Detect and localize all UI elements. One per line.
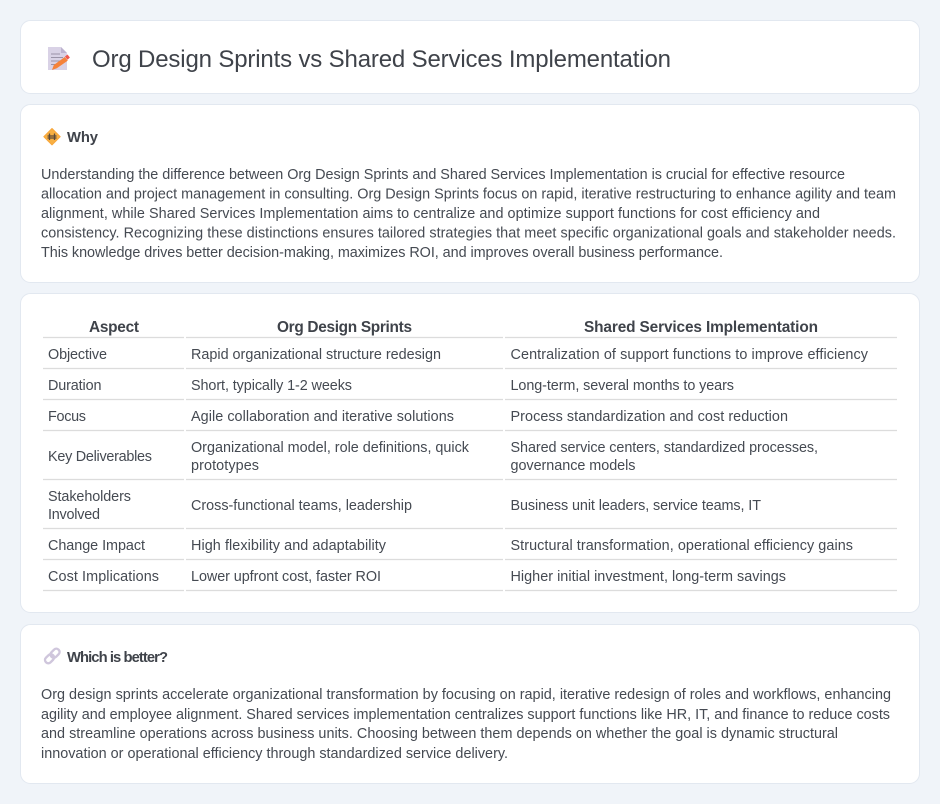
text block: why: consistency. Recognizing these distinctions ensures tailored strategies that meet specific organizational goals and stakeholder needs. — [41, 226, 896, 242]
row: objective: Centralization of support functions to improve efficiency — [510, 347, 869, 363]
text block: which is better: Org design sprints accelerate organizational transformation by focusing on rapid, iterative redesign of roles and workflows, enhancing — [41, 687, 891, 703]
row: key deliverables: Shared service centers, standardized processes, — [510, 440, 818, 456]
row: focus — [48, 409, 788, 425]
row: key deliverables: governance models — [510, 458, 636, 474]
text block: which is better: and streamline operations across business units. Choosing between them depends on whether the goal is dynamic structural — [41, 726, 838, 742]
row: stakeholders involved: Stakeholders — [48, 489, 131, 505]
title: Org Design Sprints vs Shared Services Implementation — [92, 46, 671, 73]
row: focus: Process standardization and cost reduction — [510, 409, 788, 425]
row: cost implications: Lower upfront cost, faster ROI — [191, 569, 381, 585]
row: key deliverables: Organizational model, role definitions, quick — [191, 440, 470, 456]
text block: why: allocation and project management in consulting. Org Design Sprints focus on rapid, iterative restructuring to enhance agility and team — [41, 186, 896, 202]
row: change impact — [48, 538, 853, 554]
panel: why — [20, 104, 920, 282]
text block: which is better — [41, 687, 891, 762]
row: objective — [48, 347, 869, 363]
text block: which is better: innovation or operational efficiency through standardized service delivery. — [41, 746, 508, 762]
row: cost implications: Cost Implications — [48, 569, 159, 585]
text block: which is better: agility and employee alignment. Shared services implementation centralizes support functions like HR, IT, and finance to reduce costs — [41, 707, 890, 723]
row: focus: Agile collaboration and iterative solutions — [191, 409, 454, 425]
heading: which is better: Which is better? — [67, 650, 168, 666]
table header — [89, 319, 818, 336]
row: duration: Long-term, several months to years — [510, 378, 734, 394]
row: stakeholders involved — [48, 489, 761, 523]
table header: Org Design Sprints — [277, 319, 412, 336]
panel: comparison table — [20, 294, 920, 612]
row: duration: Duration — [48, 378, 102, 394]
row: stakeholders involved: Cross-functional teams, leadership — [191, 498, 412, 514]
table header: Shared Services Implementation — [584, 319, 818, 336]
row: cost implications — [48, 569, 786, 585]
row: cost implications: Higher initial investment, long-term savings — [510, 569, 786, 585]
text block: why — [41, 167, 896, 261]
icon: chain link — [44, 647, 61, 665]
panel: which is better — [20, 624, 920, 784]
row: stakeholders involved: Involved — [48, 507, 100, 523]
row: key deliverables: prototypes — [191, 458, 259, 474]
row: key deliverables — [48, 440, 818, 474]
text block: why: alignment, while Shared Services Implementation aims to centralize and optimize support functions for cost efficiency and — [41, 206, 820, 222]
table header: Aspect — [89, 319, 139, 336]
row: objective: Rapid organizational structure redesign — [191, 347, 441, 363]
row: focus: Focus — [48, 409, 86, 425]
text block: why: Understanding the difference between Org Design Sprints and Shared Services Implementation is crucial for effective resource — [41, 167, 845, 183]
row: stakeholders involved: Business unit leaders, service teams, IT — [510, 498, 761, 514]
row: duration: Short, typically 1-2 weeks — [191, 378, 352, 394]
row: change impact: Structural transformation, operational efficiency gains — [510, 538, 853, 554]
row: key deliverables: Key Deliverables — [48, 449, 152, 465]
icon: construction diamond — [44, 128, 60, 145]
row: change impact: High flexibility and adaptability — [191, 538, 387, 554]
heading: why: Why — [67, 130, 99, 146]
icon: document with pencil — [48, 47, 70, 70]
row: objective: Objective — [48, 347, 107, 363]
text block: why: This knowledge drives better decision-making, maximizes ROI, and improves overall business performance. — [41, 245, 723, 261]
panel: header — [20, 20, 920, 94]
row: duration — [48, 378, 734, 394]
row: change impact: Change Impact — [48, 538, 145, 554]
